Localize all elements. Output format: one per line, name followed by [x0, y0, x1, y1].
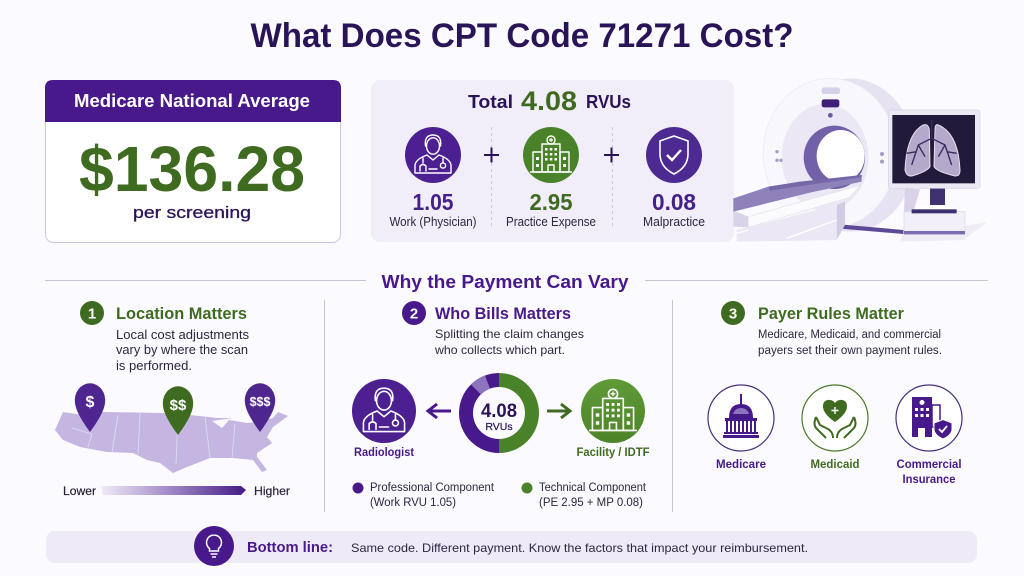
malpractice RVU: Malpractice: [643, 215, 705, 229]
map pin: lower cost: $: [86, 394, 95, 411]
panel: location matters: [55, 301, 290, 498]
price: $136.28: [79, 133, 305, 205]
title: What Does CPT Code 71271 Cost?: [250, 17, 794, 55]
panel: payer rules matter: [708, 301, 962, 486]
label: Medicare: Medicare: [716, 457, 766, 471]
cost scale: Higher: [254, 484, 290, 498]
bottom line bar: [46, 526, 977, 566]
legend: technical component: [522, 482, 647, 509]
icon: radiologist: [352, 379, 416, 443]
map pin: mid cost: $$: [170, 397, 187, 414]
heading: Payer Rules Matter: Payer Rules Matter: [758, 305, 905, 323]
map pin: mid cost: [163, 386, 193, 435]
icon: commercial insurance: [896, 385, 962, 451]
bottom line text: Same code. Different payment. Know the factors that impact your reimbursement.: [351, 541, 808, 555]
panel: Medicare national average: [45, 80, 341, 242]
description: is performed.: [116, 359, 192, 373]
arrow: to radiologist: [428, 404, 451, 418]
cost scale: Lower: [63, 484, 96, 498]
label: Commercial Insurance: Insurance: [902, 472, 956, 486]
heading: Who Bills Matters: Who Bills Matters: [435, 305, 571, 323]
legend: technical component: Technical Component: [539, 482, 647, 494]
practice expense RVU: [506, 189, 596, 229]
icon: shield: [646, 127, 702, 183]
description: Local cost adjustments: [116, 328, 249, 342]
number badge 2: [402, 301, 426, 325]
description: Splitting the claim changes: [435, 327, 584, 341]
total RVUs: Total: [468, 92, 513, 112]
work RVU: 1.05: [412, 189, 454, 215]
map pin: higher cost: $$$: [250, 395, 270, 409]
plus sign: [604, 148, 619, 162]
work RVU: [390, 189, 476, 229]
arrow: to facility: [547, 404, 570, 418]
description: [116, 328, 249, 373]
total RVUs: RVUs: [586, 92, 631, 112]
number badge 1: [80, 301, 104, 325]
section heading: Why the Payment Can Vary: Why the Payment Can Vary: [382, 271, 629, 292]
malpractice RVU: 0.08: [652, 189, 696, 215]
icon: hospital: [523, 127, 579, 183]
legend: professional component: Professional Component: [370, 482, 495, 494]
work RVU: Work (Physician): [390, 215, 476, 229]
legend: professional component: (Work RVU 1.05): [370, 497, 456, 509]
illustration: CT scanner and monitor: [733, 78, 987, 242]
donut chart: 4.08 RVUs: RVUs: [485, 421, 513, 433]
icon: physician: [405, 127, 461, 183]
map pin: higher cost: [245, 383, 275, 432]
description: vary by where the scan: [116, 343, 248, 357]
number badge 2: 2: [410, 306, 418, 322]
description: who collects which part.: [434, 343, 565, 357]
total RVUs: 4.08: [521, 86, 577, 116]
icon: light bulb: [194, 526, 234, 566]
donut chart: 4.08 RVUs: [459, 373, 539, 453]
total RVUs: [468, 86, 631, 116]
map: United States: [55, 412, 288, 473]
label: radiologist: Radiologist: [354, 445, 414, 459]
malpractice RVU: [643, 189, 705, 229]
practice expense RVU: Practice Expense: [506, 215, 596, 229]
donut chart: 4.08 RVUs: 4.08: [481, 401, 517, 422]
panel: RVU breakdown: [371, 80, 734, 242]
description: [758, 329, 942, 357]
heading: Medicare National Average: Medicare National Average: [74, 91, 310, 111]
icon: Medicare capitol: [708, 385, 774, 451]
map pin: lower cost: [75, 383, 105, 432]
bottom line label: Bottom line:: [247, 539, 333, 556]
cost scale: [63, 484, 290, 498]
label: Medicaid: Medicaid: [810, 457, 860, 471]
legend: professional component: [352, 482, 495, 509]
number badge 3: [721, 301, 745, 325]
price caption: per screening: [133, 203, 251, 222]
number badge 1: 1: [88, 306, 96, 322]
description: [434, 327, 584, 357]
heading: Location Matters: Location Matters: [116, 305, 247, 323]
legend: technical component: (PE 2.95 + MP 0.08): [539, 497, 643, 509]
description: payers set their own payment rules.: [758, 345, 942, 357]
icon: facility: [581, 379, 645, 443]
label: Commercial Insurance: Commercial: [896, 457, 962, 471]
practice expense RVU: 2.95: [530, 189, 573, 215]
plus sign: [484, 148, 499, 162]
label: facility: Facility / IDTF: [576, 445, 650, 459]
icon: Medicaid heart and hands: [802, 385, 868, 451]
description: Medicare, Medicaid, and commercial: [758, 329, 941, 341]
panel: who bills matters: [352, 301, 650, 509]
number badge 3: 3: [729, 306, 737, 322]
label: Commercial Insurance: [896, 457, 962, 486]
